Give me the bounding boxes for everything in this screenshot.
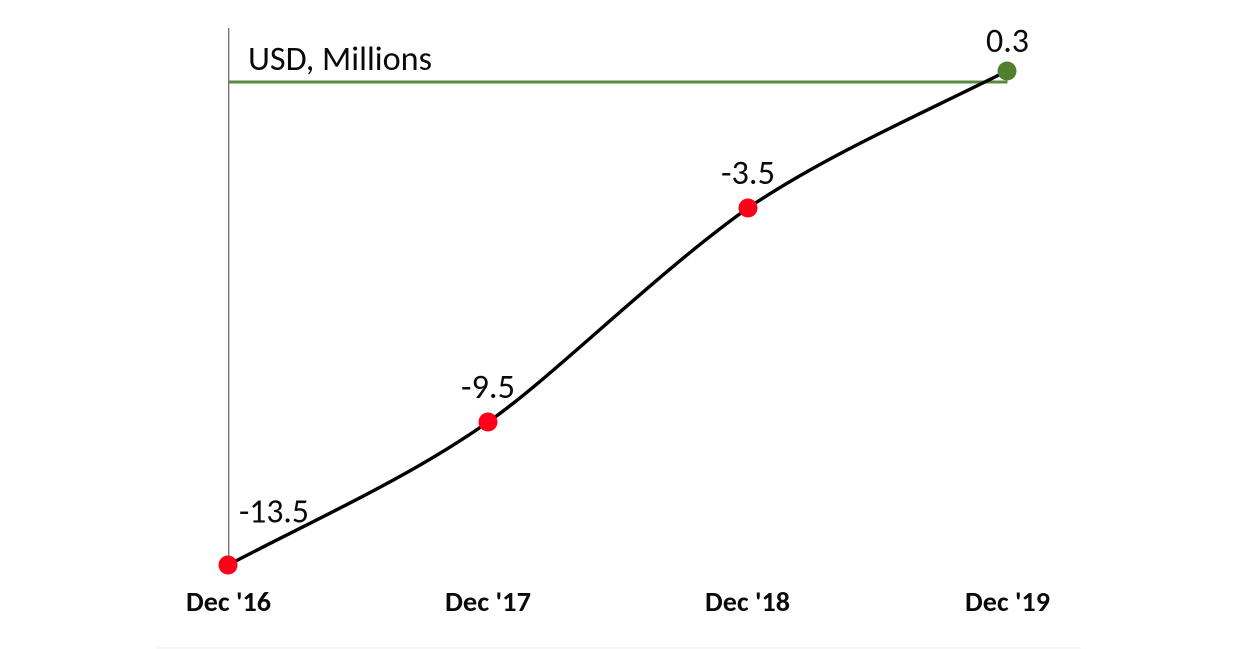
data point: Dec 2016: -13.5	[239, 492, 309, 532]
x-axis labels: Dec '18	[705, 586, 790, 619]
trend line	[228, 71, 1007, 565]
data point: Dec 2017: -9.5	[461, 367, 515, 408]
x-axis labels: Dec '19	[965, 586, 1050, 619]
green zero baseline	[229, 80, 1008, 84]
x-axis labels	[186, 586, 1050, 619]
x-axis labels: Dec '16	[186, 586, 271, 619]
data point: Dec 2018	[721, 153, 775, 218]
axis unit label: USD, Millions	[248, 39, 432, 80]
data point: Dec 2019	[986, 21, 1029, 80]
x-axis labels: Dec '17	[445, 586, 531, 619]
data point: Dec 2019: 0.3	[986, 21, 1029, 62]
vertical axis	[228, 28, 230, 565]
data point: Dec 2016	[218, 492, 309, 574]
data point: Dec 2017	[461, 367, 515, 432]
data point: Dec 2018: -3.5	[721, 153, 775, 194]
